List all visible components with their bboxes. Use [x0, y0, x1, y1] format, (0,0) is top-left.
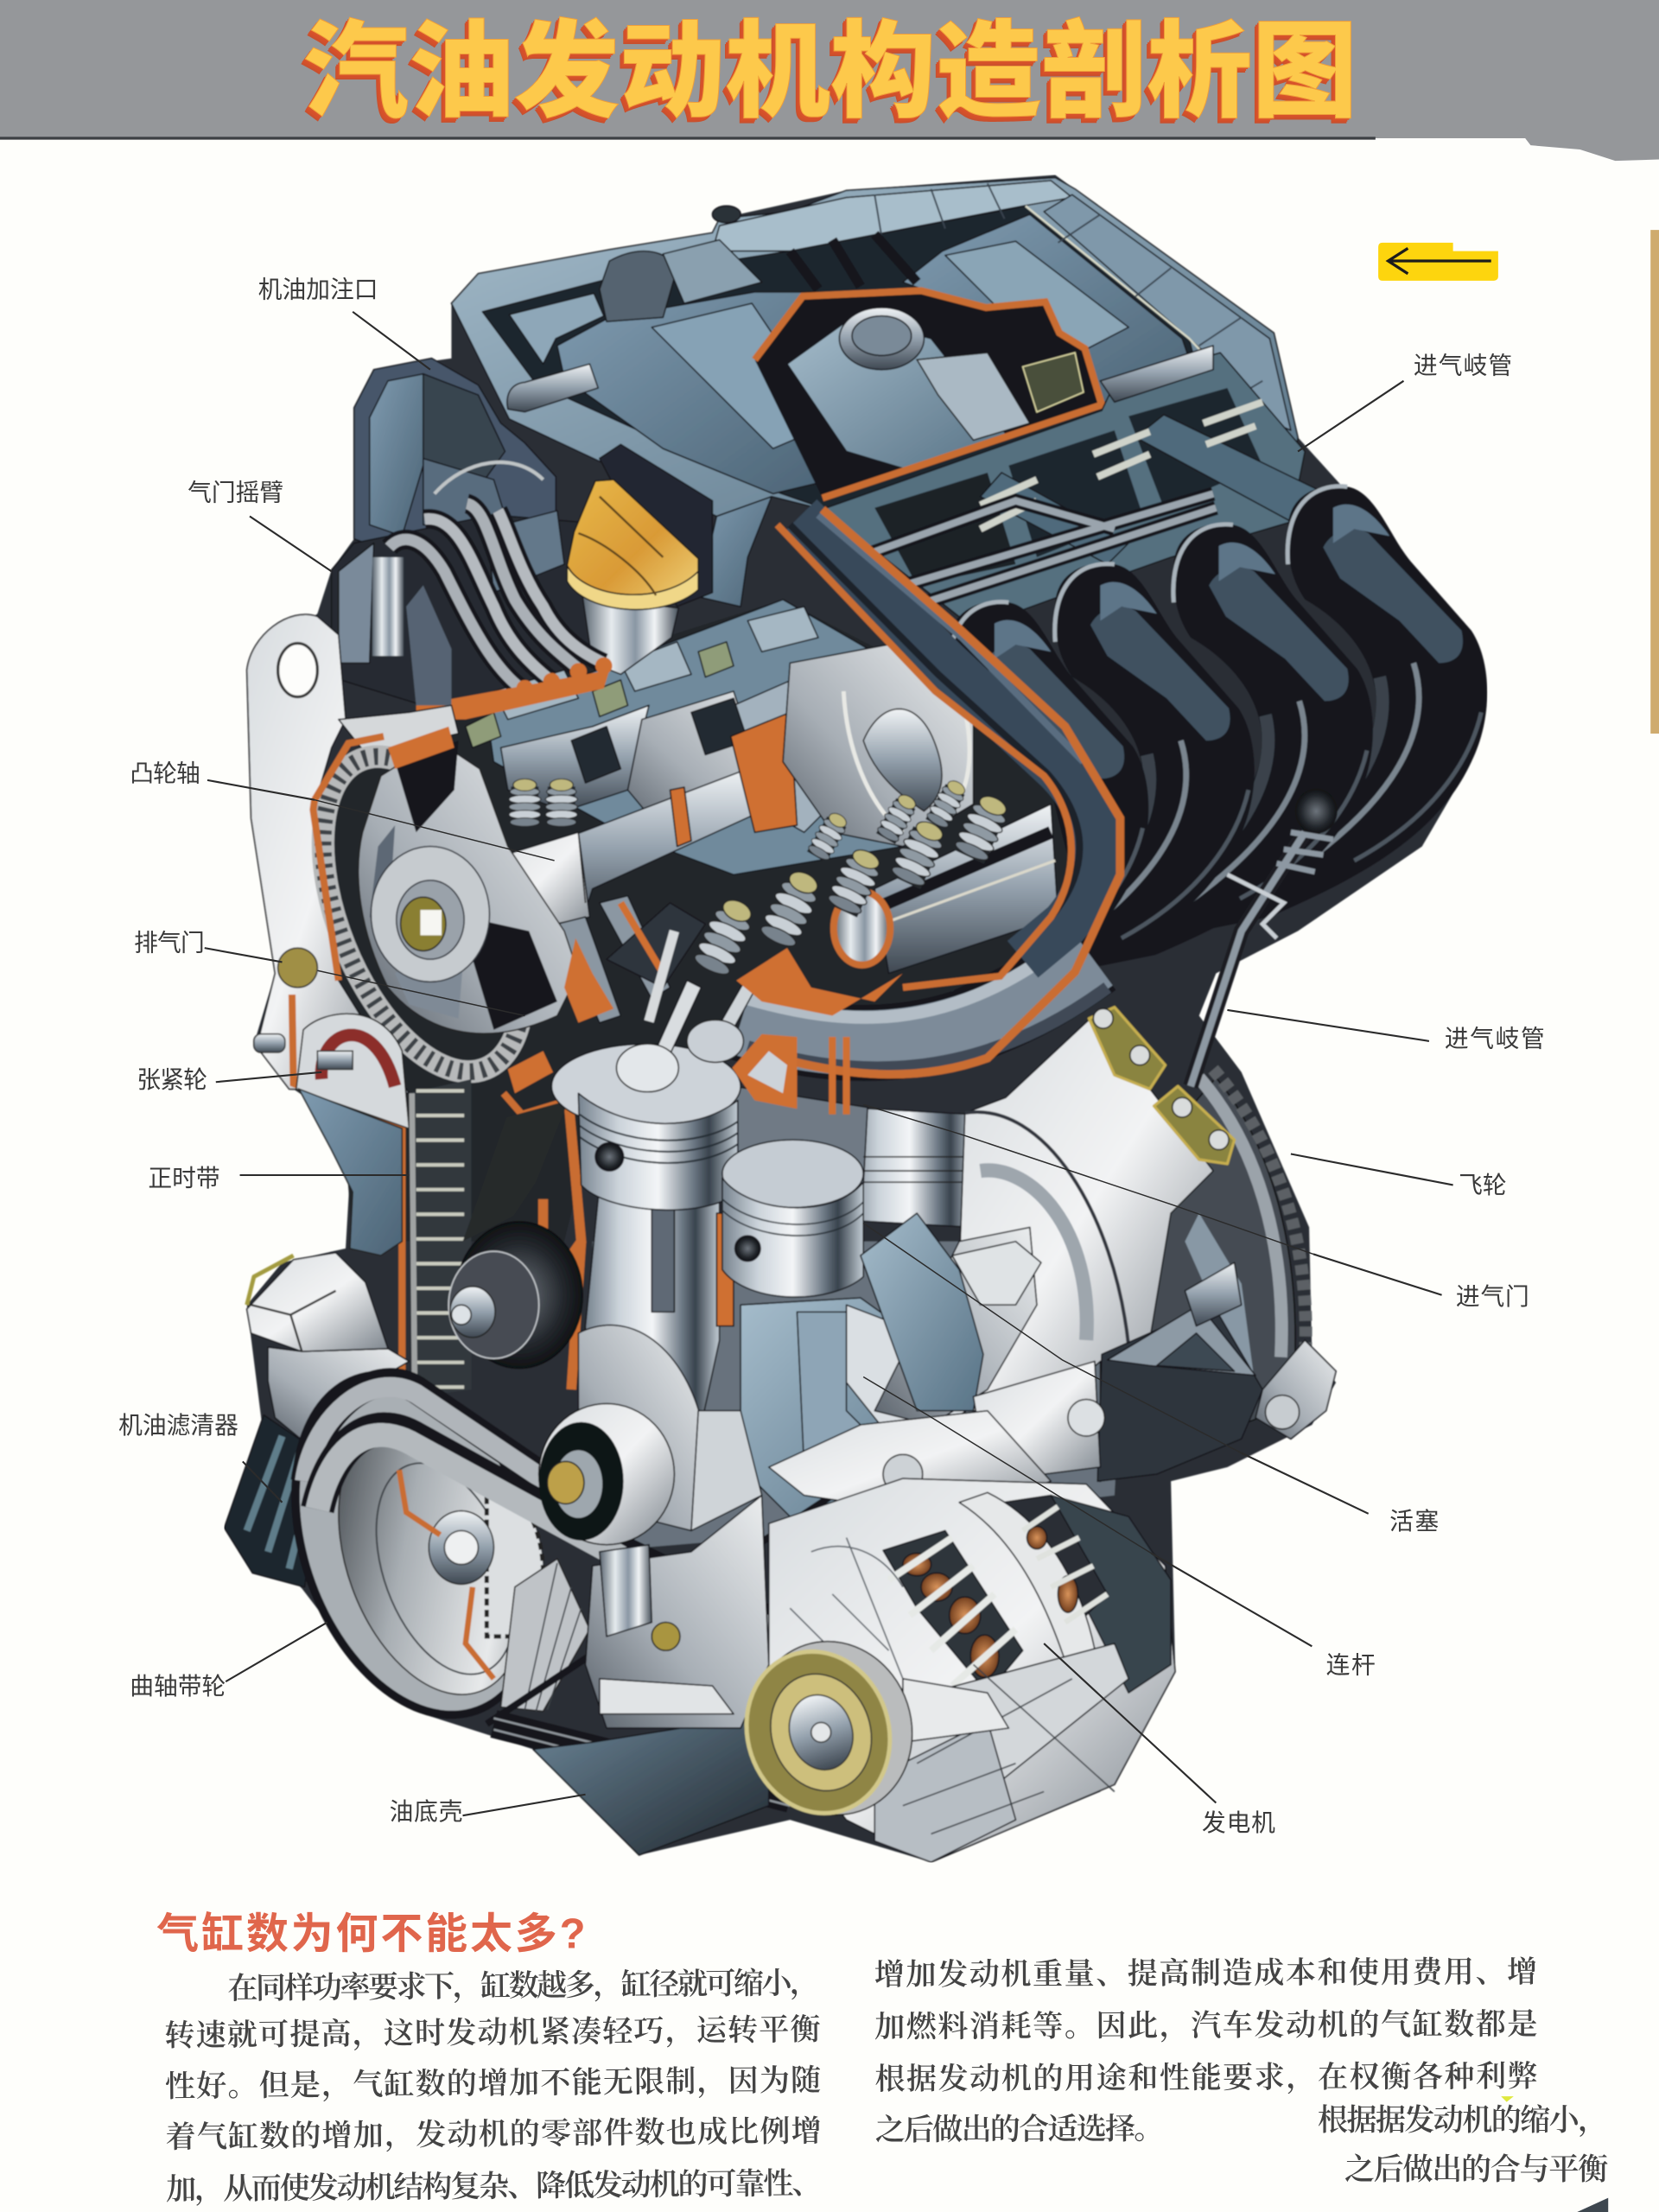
- overlaid correction text: 根据据发动机的缩小，: [1318, 2103, 1608, 2137]
- central lower backing: [593, 1242, 1128, 1552]
- label: rocker arm: 气门摇臂: [188, 480, 283, 506]
- back housing: [354, 359, 556, 564]
- part labels: [118, 276, 1545, 1836]
- section heading: 气缸数为何不能太多?: [156, 1911, 586, 1958]
- tensioner pulley: [254, 1014, 409, 1128]
- bottom right corner fragment: [1577, 2198, 1608, 2212]
- body text left column: 性好。但是，气缸数的增加不能无限制，因为随: [165, 2063, 821, 2104]
- valve cover: [451, 178, 1298, 607]
- crank web: [578, 1325, 705, 1530]
- yellow arrow callout: [1378, 243, 1498, 281]
- label: oil filter: 机油滤清器: [118, 1412, 238, 1439]
- gold brackets: [1089, 1007, 1235, 1164]
- body text left column: 在同样功率要求下，缸数越多，缸径就可缩小，: [227, 1967, 820, 2005]
- valve springs: [509, 777, 1014, 980]
- leader lines crossing the engine: [315, 800, 1313, 1554]
- alternator: [769, 1478, 1175, 1862]
- body text right column: [874, 1955, 1538, 2147]
- cam cavity background: [317, 600, 1072, 1242]
- label: generator: 发电机: [1202, 1809, 1275, 1836]
- body text left column: 着气缸数的增加，发动机的零部件数也成比例增: [165, 2114, 822, 2154]
- small green mark: [1501, 2096, 1514, 2102]
- engine silhouette base: [228, 175, 1487, 1862]
- silver teardrop housing: [783, 642, 974, 847]
- label: intake manifold upper: 进气岐管: [1414, 353, 1512, 379]
- body text right column: 之后做出的合适选择。: [875, 2112, 1164, 2147]
- right edge tan strip: [1650, 230, 1659, 734]
- orange head ports: [564, 903, 903, 1115]
- alternator pulley: [726, 1620, 934, 1836]
- accessory drive belt: [305, 1382, 832, 1806]
- gearbox bell housing: [861, 1016, 1213, 1425]
- engine illustration: [225, 175, 1487, 1862]
- leader lines: [205, 312, 1453, 1815]
- body text left column: 转速就可提高，这时发动机紧凑轻巧，运转平衡: [164, 2012, 821, 2053]
- label: flywheel: 飞轮: [1459, 1172, 1507, 1198]
- title: 汽油发动机构造剖析图: [303, 13, 1357, 130]
- left bracket with mounting eye: [247, 614, 459, 1093]
- cutaway window with oil tube fitting: [754, 290, 1102, 498]
- valve guides under cam: [557, 896, 671, 1023]
- label: intake valve: 进气门: [1456, 1283, 1529, 1310]
- exhaust tube in cavity: [874, 804, 1058, 974]
- connecting rod 2 web: [741, 1298, 974, 1530]
- piston 1: [578, 1093, 738, 1210]
- idler pulley: [448, 1222, 582, 1369]
- camshaft and rocker assembly: [466, 600, 1058, 1023]
- body text right column: 增加发动机重量、提高制造成本和使用费用、增: [874, 1955, 1537, 1992]
- intake manifold runners: [861, 486, 1487, 1046]
- rear piston block: [847, 1108, 974, 1227]
- overlaid correction text: 之后做出的合与平衡: [1344, 2152, 1608, 2186]
- crankshaft pulley: [245, 1336, 589, 1754]
- dipstick: [1191, 789, 1338, 1086]
- left gearcase wall: [299, 1089, 402, 1255]
- flywheel: [1100, 1070, 1306, 1481]
- label: exhaust valve: 排气门: [134, 929, 205, 956]
- camshaft timing gear: [283, 728, 578, 1100]
- label: camshaft: 凸轮轴: [130, 760, 200, 786]
- label: timing belt: 正时带: [148, 1165, 220, 1192]
- body text right column: 加燃料消耗等。因此，汽车发动机的气缸数都是: [874, 2007, 1538, 2044]
- piston 2: [722, 1140, 863, 1208]
- upper rocker cover band: [486, 600, 917, 874]
- rear mount bracket: [974, 1262, 1336, 1481]
- label: oil filler: 机油加注口: [258, 276, 378, 302]
- timing belt: [409, 1079, 471, 1396]
- label: piston: 活塞: [1389, 1508, 1439, 1535]
- idler belt pulley: [539, 1403, 674, 1545]
- connecting rod 1: [586, 1185, 720, 1439]
- label: tensioner: 张紧轮: [137, 1066, 207, 1093]
- valves: [649, 981, 701, 1070]
- body text left column: [164, 1967, 822, 2207]
- intake pipe, inner and outer orange walls: [741, 509, 1120, 1074]
- header band: [0, 0, 1659, 161]
- piston assembly: [551, 981, 976, 1530]
- rocker arms: [501, 705, 649, 811]
- label: intake manifold lower: 进气岐管: [1445, 1025, 1545, 1052]
- overlaid correction text: [1318, 2103, 1608, 2186]
- vacuum tubes: [372, 504, 613, 720]
- label: oil pan: 油底壳: [390, 1798, 463, 1825]
- oil filter housing: [247, 1253, 409, 1445]
- piston 3 rings: [863, 1157, 976, 1182]
- black belt section: [463, 1100, 569, 1242]
- exhaust valve bolt: [278, 948, 317, 988]
- label: crank pulley: 曲轴带轮: [130, 1673, 226, 1700]
- lower-left housing: [332, 511, 620, 705]
- orange timing cover section: [292, 727, 582, 1389]
- body text left column: 加，从而使发动机结构复杂、降低发动机的可靠性、: [166, 2166, 822, 2207]
- body text right column: 根据发动机的用途和性能要求，在权衡各种利弊: [874, 2060, 1538, 2096]
- oil pan: [533, 1714, 769, 1855]
- oil filter: [225, 1415, 313, 1587]
- engine lower block: [586, 1411, 1051, 1728]
- camshaft: [486, 769, 762, 931]
- gold oil cap: [567, 480, 698, 674]
- label: connecting rod: 连杆: [1326, 1651, 1376, 1678]
- manifold deck with fuel rails: [823, 346, 1323, 628]
- combustion dome: [551, 1044, 741, 1128]
